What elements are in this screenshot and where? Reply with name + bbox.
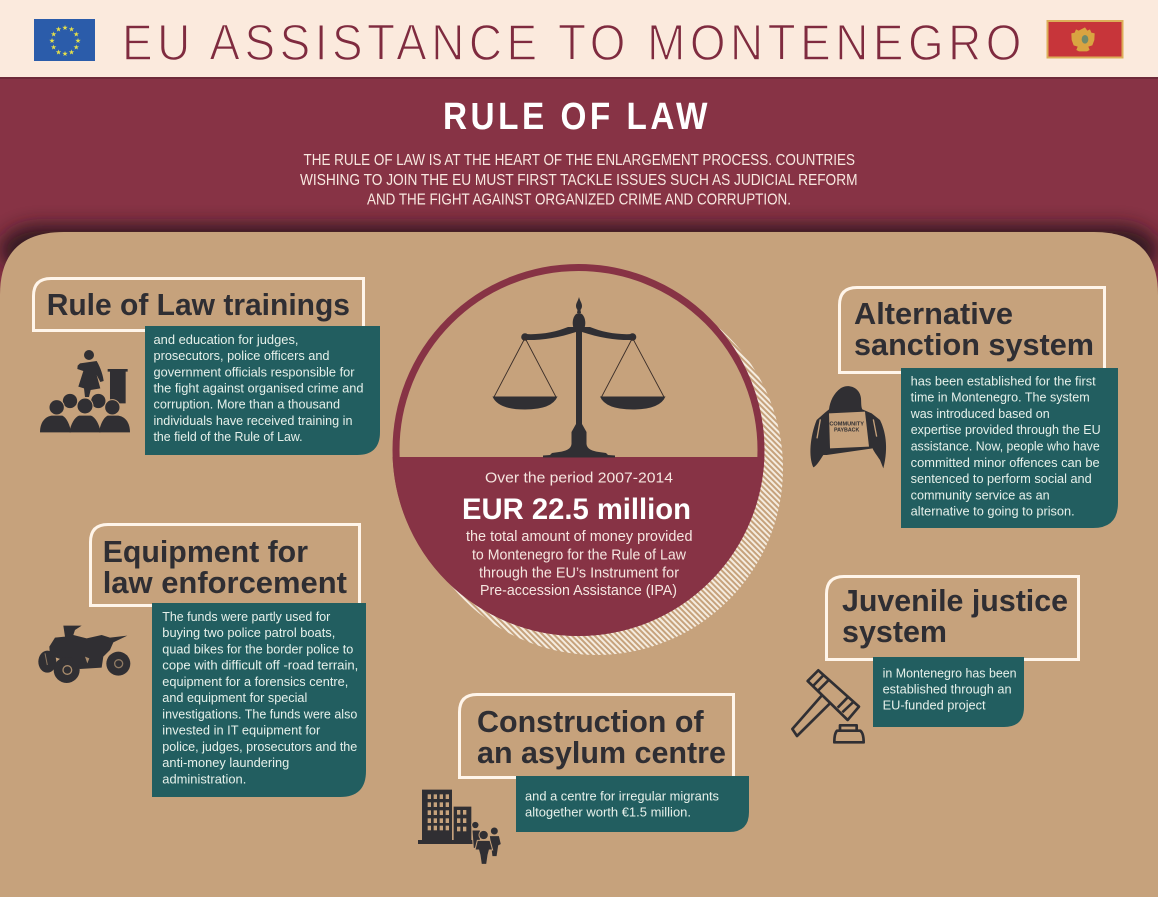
centre text (462, 471, 692, 599)
text box (901, 368, 1118, 528)
heading: system (842, 614, 947, 649)
text box (873, 657, 1024, 727)
heading box (90, 524, 360, 606)
intro text (300, 152, 858, 209)
heading: Equipment for (103, 534, 308, 569)
panel: Construction of an asylum centre (418, 694, 749, 864)
body text: assistance. Now, people who have (911, 440, 1100, 454)
header band (0, 0, 1158, 79)
icon: EU flag: ★ (68, 26, 75, 34)
icon: Montenegro flag (1048, 21, 1122, 58)
icon: EU flag (34, 19, 95, 61)
body text: quad bikes for the border police to (162, 642, 353, 656)
body text (883, 666, 1017, 713)
text box (152, 603, 366, 797)
body text (162, 610, 358, 786)
heading: Rule of Law trainings (47, 287, 350, 322)
heading: Rule of Law: RULE OF LAW (443, 96, 711, 138)
icon: EU flag: ★ (49, 37, 55, 45)
body text: established through an (883, 682, 1012, 696)
main tan panel (0, 225, 1158, 897)
icon: EU flag: ★ (51, 44, 57, 52)
icon: scales of justice (492, 297, 666, 458)
body text (525, 790, 719, 820)
panel: Juvenile justice system (792, 576, 1078, 742)
body text: expertise provided through the EU (911, 423, 1101, 437)
body text: prosecutors, police officers and (154, 349, 330, 363)
body text: the fight against organised crime and (154, 382, 364, 396)
body text: time in Montenegro. The system (911, 391, 1090, 405)
icon: EU flag: ★ (51, 30, 57, 38)
intro text: AND THE FIGHT AGAINST ORGANIZED CRIME AND CORRUPTION. (367, 192, 791, 209)
icon: EU flag: ★ (73, 30, 79, 38)
body text: was introduced based on (910, 407, 1050, 421)
body text: altogether worth €1.5 million. (525, 806, 691, 820)
body text: The funds were partly used for (162, 610, 330, 624)
heading: Construction of (477, 704, 704, 739)
icon: EU flag: ★ (55, 26, 62, 34)
body text: equipment for a forensics centre, (162, 675, 348, 689)
body text: investigations. The funds were also (162, 707, 357, 721)
panel: Alternative sanction system (810, 288, 1118, 528)
body text: buying two police patrol boats, (162, 626, 335, 640)
body text: has been established for the first (911, 374, 1096, 388)
icon: community payback worker (810, 386, 886, 468)
body text: alternative to going to prison. (911, 505, 1075, 519)
heading: Alternative (854, 296, 1013, 331)
icon: EU flag: ★ (68, 48, 75, 56)
body text (154, 333, 364, 444)
body text: in Montenegro has been (883, 666, 1017, 680)
heading: an asylum centre (477, 735, 726, 770)
text box (516, 776, 749, 832)
icon: EU flag: ★ (62, 24, 68, 32)
icon: buildings and people (418, 790, 501, 864)
icon: community payback worker: COMMUNITY (829, 421, 864, 427)
central circle (392, 264, 783, 655)
body text: the field of the Rule of Law. (154, 430, 302, 444)
body text (910, 374, 1101, 519)
body text: committed minor offences can be (911, 456, 1100, 470)
heading box (840, 288, 1104, 372)
centre text: Pre-accession Assistance (IPA) (480, 583, 677, 599)
panel: Rule of Law trainings (34, 278, 380, 455)
body text: government officials responsible for (154, 365, 354, 379)
icon: gavel (792, 670, 864, 742)
heading: Juvenile justice (842, 583, 1068, 618)
body text: police, judges, prosecutors and the (162, 740, 357, 754)
icon: EU flag: ★ (62, 50, 68, 58)
centre text: the total amount of money provided (466, 529, 692, 545)
heading (103, 534, 347, 600)
icon: EU flag: ★ (75, 37, 81, 45)
body text: invested in IT equipment for (162, 724, 320, 738)
body text: community service as an (911, 488, 1050, 502)
centre text: to Montenegro for the Rule of Law (472, 547, 687, 563)
heading: law enforcement (103, 565, 347, 600)
icon: EU flag: ★ (55, 48, 62, 56)
centre text: through the EU’s Instrument for (479, 565, 679, 581)
body text: and a centre for irregular migrants (525, 790, 719, 804)
panel: Equipment for law enforcement (38, 524, 366, 797)
body text: sentenced to perform social and (911, 472, 1092, 486)
heading box (34, 278, 364, 330)
icon: EU flag: ★ (73, 44, 79, 52)
body text: anti-money laundering (162, 756, 289, 770)
icon: community payback worker: PAYBACK (834, 427, 859, 433)
body text: administration. (162, 772, 246, 786)
title: EU ASSISTANCE TO MONTENEGRO (122, 14, 1026, 71)
body text: and education for judges, (154, 333, 298, 347)
heading (854, 296, 1094, 362)
amount: EUR 22.5 million (462, 493, 691, 526)
text box (145, 326, 380, 455)
hatched shadow circle (410, 282, 783, 655)
heading: sanction system (854, 327, 1094, 362)
intro text: WISHING TO JOIN THE EU MUST FIRST TACKLE ISSUES SUCH AS JUDICIAL REFORM (300, 172, 858, 189)
body text: individuals have received training in (154, 414, 353, 428)
body text: corruption. More than a thousand (154, 398, 340, 412)
heading box (826, 576, 1078, 660)
icon: trainer and audience (40, 350, 130, 432)
heading (842, 583, 1068, 649)
centre text: Over the period 2007-2014 (485, 471, 673, 487)
body text: cope with difficult off -road terrain, (162, 659, 358, 673)
heading box (460, 694, 734, 778)
body text: EU-funded project (883, 699, 986, 713)
heading (477, 704, 726, 770)
icon: quad bike (38, 626, 130, 683)
intro text: THE RULE OF LAW IS AT THE HEART OF THE ENLARGEMENT PROCESS. COUNTRIES (304, 152, 855, 169)
body text: and equipment for special (162, 691, 307, 705)
